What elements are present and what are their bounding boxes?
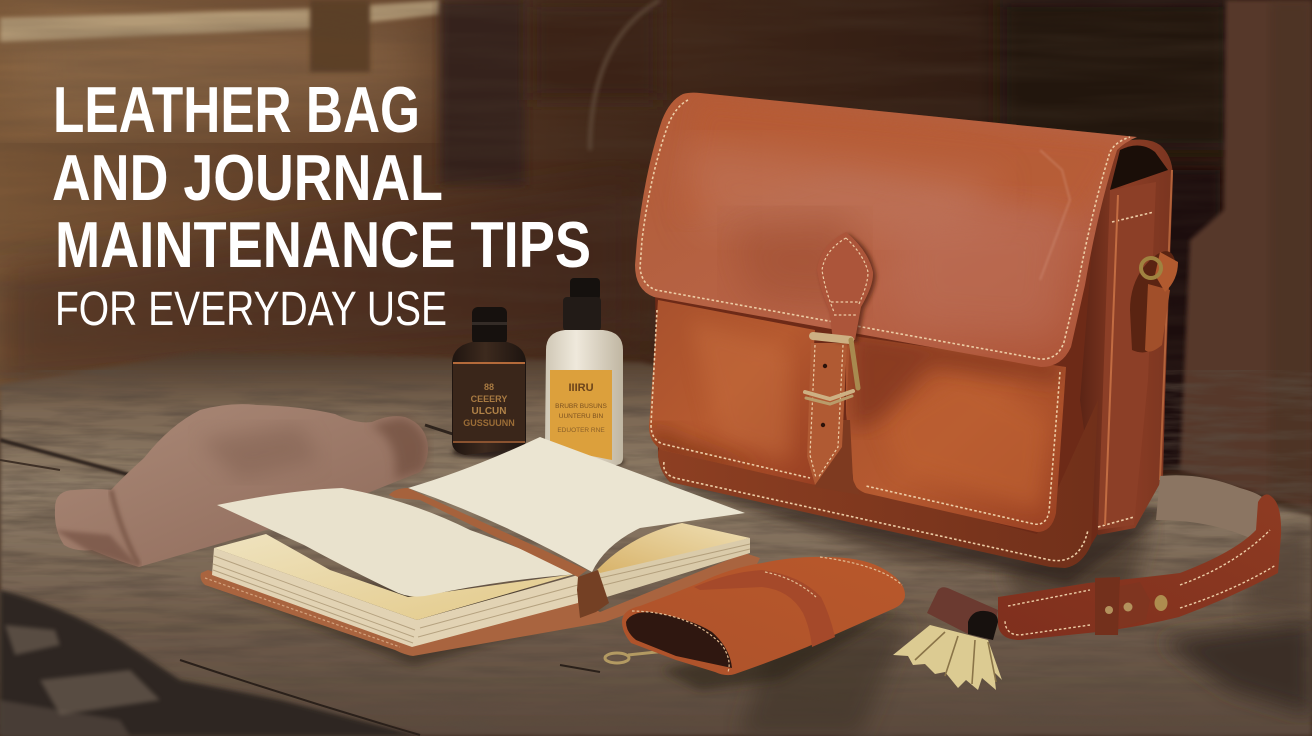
journal cover xyxy=(200,553,760,656)
dark bottle label: CEEERY xyxy=(471,394,507,404)
bag lower body xyxy=(658,400,1098,568)
bag side gusset xyxy=(1080,140,1173,535)
open journal xyxy=(200,437,760,665)
dark conditioner bottle xyxy=(452,307,528,458)
title: FOR EVERYDAY USE xyxy=(55,283,447,336)
elastic band xyxy=(389,488,609,618)
strap keeper xyxy=(1095,577,1120,635)
bag front flap xyxy=(635,93,1137,367)
journal shadow xyxy=(200,580,600,665)
key roll shadow xyxy=(660,610,900,690)
bag left pocket xyxy=(649,300,815,485)
white bottle label: UUNTERU BIN xyxy=(559,413,604,420)
white cleaner bottle xyxy=(545,278,625,468)
white bottle label: BRUBR BUSUNS xyxy=(555,403,607,410)
bag right pocket xyxy=(846,330,1066,532)
white bottle label: EDUOTER RNE xyxy=(557,427,605,434)
bristle brush xyxy=(893,587,1002,690)
background: right wooden post xyxy=(1180,0,1312,510)
leather key roll xyxy=(605,557,905,690)
brass buckle xyxy=(805,336,858,404)
dark bottle label: ULCUN xyxy=(472,406,506,417)
strap belt xyxy=(998,494,1281,640)
title xyxy=(52,73,591,336)
leather messenger bag xyxy=(635,93,1178,585)
yellow pages xyxy=(214,534,575,620)
cloth: suede polishing rag xyxy=(55,404,428,567)
suede strap lining xyxy=(1156,475,1262,542)
left leaf xyxy=(217,488,578,597)
key ring xyxy=(605,648,695,663)
bag backing xyxy=(655,150,1110,568)
buckle strap xyxy=(807,343,847,485)
right leaf xyxy=(408,437,745,572)
title: MAINTENANCE TIPS xyxy=(55,208,591,281)
white bottle label: IIIRU xyxy=(568,382,594,394)
dark bottle label xyxy=(453,362,525,443)
title: LEATHER BAG xyxy=(53,73,420,146)
white bottle label xyxy=(550,370,612,460)
title: AND JOURNAL xyxy=(52,141,443,214)
background: wooden wall xyxy=(0,0,1312,470)
rivets xyxy=(1105,595,1168,614)
brush head xyxy=(927,587,998,640)
wrap band xyxy=(694,570,835,647)
strap with suede lining xyxy=(998,475,1281,640)
strap tab xyxy=(817,232,876,342)
page block xyxy=(212,538,750,647)
bag shadow xyxy=(660,480,1170,585)
centre join between pockets xyxy=(815,420,860,495)
shoulder ring xyxy=(1130,251,1178,352)
bristles xyxy=(893,625,1002,690)
dark bottle label: GUSSUUNN xyxy=(463,418,515,428)
rustic wooden table xyxy=(0,352,1312,736)
dark bottle label: 88 xyxy=(484,382,494,392)
